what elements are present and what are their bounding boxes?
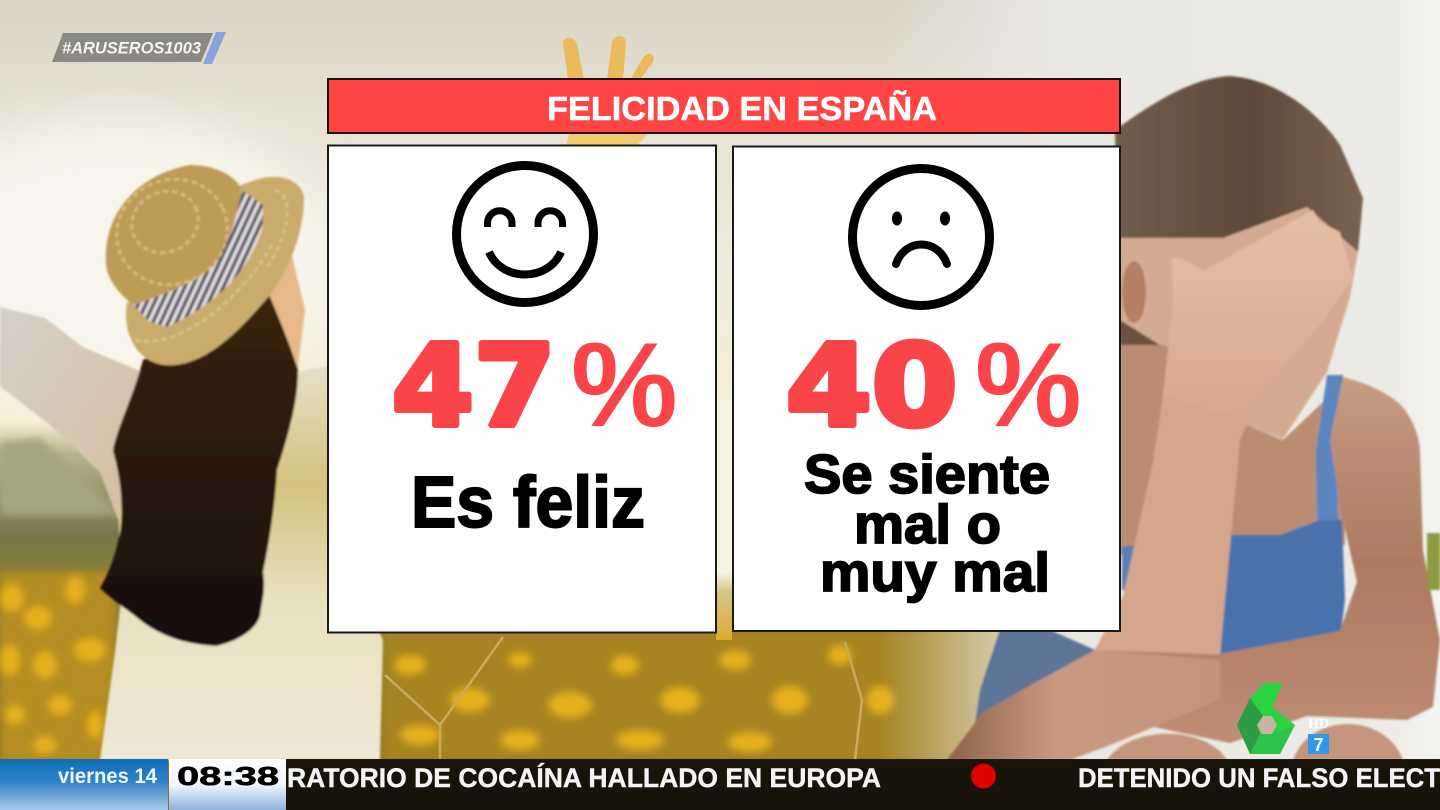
- straw weave: [99, 161, 287, 341]
- channel logo: [1237, 683, 1329, 755]
- figure: 47 percent: 47: [392, 322, 556, 452]
- chest: [1120, 345, 1345, 555]
- date box: viernes 14: [58, 765, 157, 788]
- icon: smiling face: [456, 166, 594, 302]
- raised arm: [0, 307, 140, 520]
- neck and face: [262, 255, 305, 375]
- raised forearm: [1095, 395, 1247, 654]
- headline 1: RATORIO DE COCAÍNA HALLADO EN EUROPA: [287, 762, 881, 793]
- label: es feliz: Es feliz: [411, 463, 645, 543]
- logo dark part: [1237, 698, 1263, 754]
- lower hand and forearm: [947, 650, 1220, 760]
- hair: [1115, 76, 1363, 350]
- label: se siente mal o muy mal: mal o: [854, 493, 1001, 555]
- hand behind the title: [563, 36, 654, 146]
- ear: [1122, 261, 1146, 323]
- hair tail: [1120, 318, 1162, 348]
- tag accent: [203, 32, 226, 64]
- forehead and face: [1120, 207, 1358, 439]
- label: se siente mal o muy mal: [804, 443, 1050, 603]
- shoulder and right arm: [1095, 377, 1440, 743]
- figure: 47 percent: [392, 318, 678, 452]
- knees: [1107, 724, 1403, 760]
- green object: [1427, 533, 1440, 590]
- tag body: [52, 33, 213, 62]
- icon: sad face: [852, 168, 990, 306]
- hat band: [133, 190, 263, 327]
- figure: 40 percent: [786, 318, 1082, 452]
- figure: 40 percent: %: [975, 318, 1082, 452]
- panel: unhappy: [733, 146, 1120, 631]
- HD mark: HD: [1308, 717, 1329, 732]
- hat brim: [126, 177, 304, 365]
- news ticker: [0, 759, 1440, 810]
- long dark hair: [100, 290, 298, 646]
- hashtag tag: [52, 32, 226, 64]
- time box: 08:38: [177, 761, 279, 791]
- torso: [100, 366, 383, 760]
- figure: 47 percent: %: [571, 318, 678, 452]
- figure: 40 percent: 40: [786, 321, 957, 452]
- background photo: right side fade: [880, 0, 1440, 760]
- logo lower facet: [1250, 725, 1295, 754]
- photo: happy woman: [0, 161, 383, 760]
- hand over the forehead: [1163, 210, 1353, 422]
- title banner: FELICIDAD EN ESPAÑA: [547, 90, 937, 127]
- title banner: [328, 79, 1120, 133]
- channel logo: 7: [1313, 735, 1324, 755]
- logo light part: [1237, 683, 1295, 754]
- straw hat: [99, 161, 304, 365]
- date box: [0, 759, 168, 810]
- logo centre hole: [1257, 716, 1277, 734]
- panel: happy: [328, 146, 716, 632]
- channel 7 badge: [1308, 734, 1329, 754]
- blue top: [975, 375, 1345, 725]
- hat crown: [106, 165, 242, 305]
- hashtag tag: #ARUSEROS1003: [62, 38, 202, 58]
- time box: [169, 759, 286, 810]
- label: se siente mal o muy mal: Se siente: [804, 443, 1050, 505]
- photo: sad woman: [947, 76, 1440, 760]
- label: se siente mal o muy mal: muy mal: [820, 541, 1050, 603]
- red dot separator: [971, 764, 996, 788]
